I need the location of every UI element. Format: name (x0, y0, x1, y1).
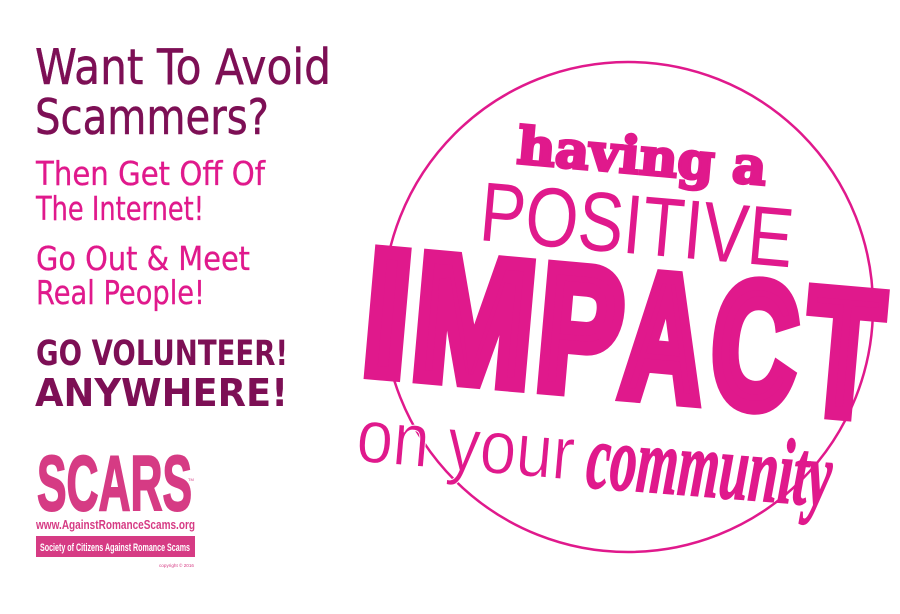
heading: want to avoid scammers: Want To Avoid (35, 39, 331, 96)
title: impact: C (704, 243, 805, 447)
text block: go volunteer anywhere: ANYWHERE! (35, 371, 288, 415)
title: impact (356, 213, 889, 455)
logo: SCARS (35, 439, 195, 568)
heading: want to avoid scammers: Scammers? (35, 89, 269, 146)
title: impact: T (798, 253, 889, 455)
copyright: copyright © 2016 (159, 562, 195, 568)
text block: meet real people: Go Out & Meet (36, 239, 250, 278)
text block: go volunteer anywhere: GO VOLUNTEER! (36, 334, 288, 374)
logo wordmark: SCARS (37, 439, 192, 527)
logo trademark: TM (188, 477, 194, 482)
text block: meet real people (36, 239, 250, 312)
text block: go volunteer anywhere (35, 334, 288, 415)
logo banner text: Society of Citizens Against Romance Scams (40, 542, 190, 554)
title: having a: having a (515, 116, 769, 198)
logo url: www.AgainstRomanceScams.org (35, 518, 195, 532)
text block: get off the internet (35, 154, 266, 228)
title: impact: P (531, 229, 630, 432)
circle outline (383, 62, 873, 552)
text block: get off the internet: Then Get Off Of (35, 154, 266, 193)
text block: meet real people: Real People! (36, 273, 205, 312)
title: impact: I (356, 214, 419, 414)
title: positive: POSITIVE (476, 164, 797, 285)
text block: get off the internet: The Internet! (35, 189, 204, 228)
logo banner (36, 536, 195, 557)
title: on your: on your (354, 393, 578, 497)
title: impact: A (616, 237, 713, 439)
heading: want to avoid scammers (35, 39, 331, 146)
title: impact: M (406, 218, 543, 425)
